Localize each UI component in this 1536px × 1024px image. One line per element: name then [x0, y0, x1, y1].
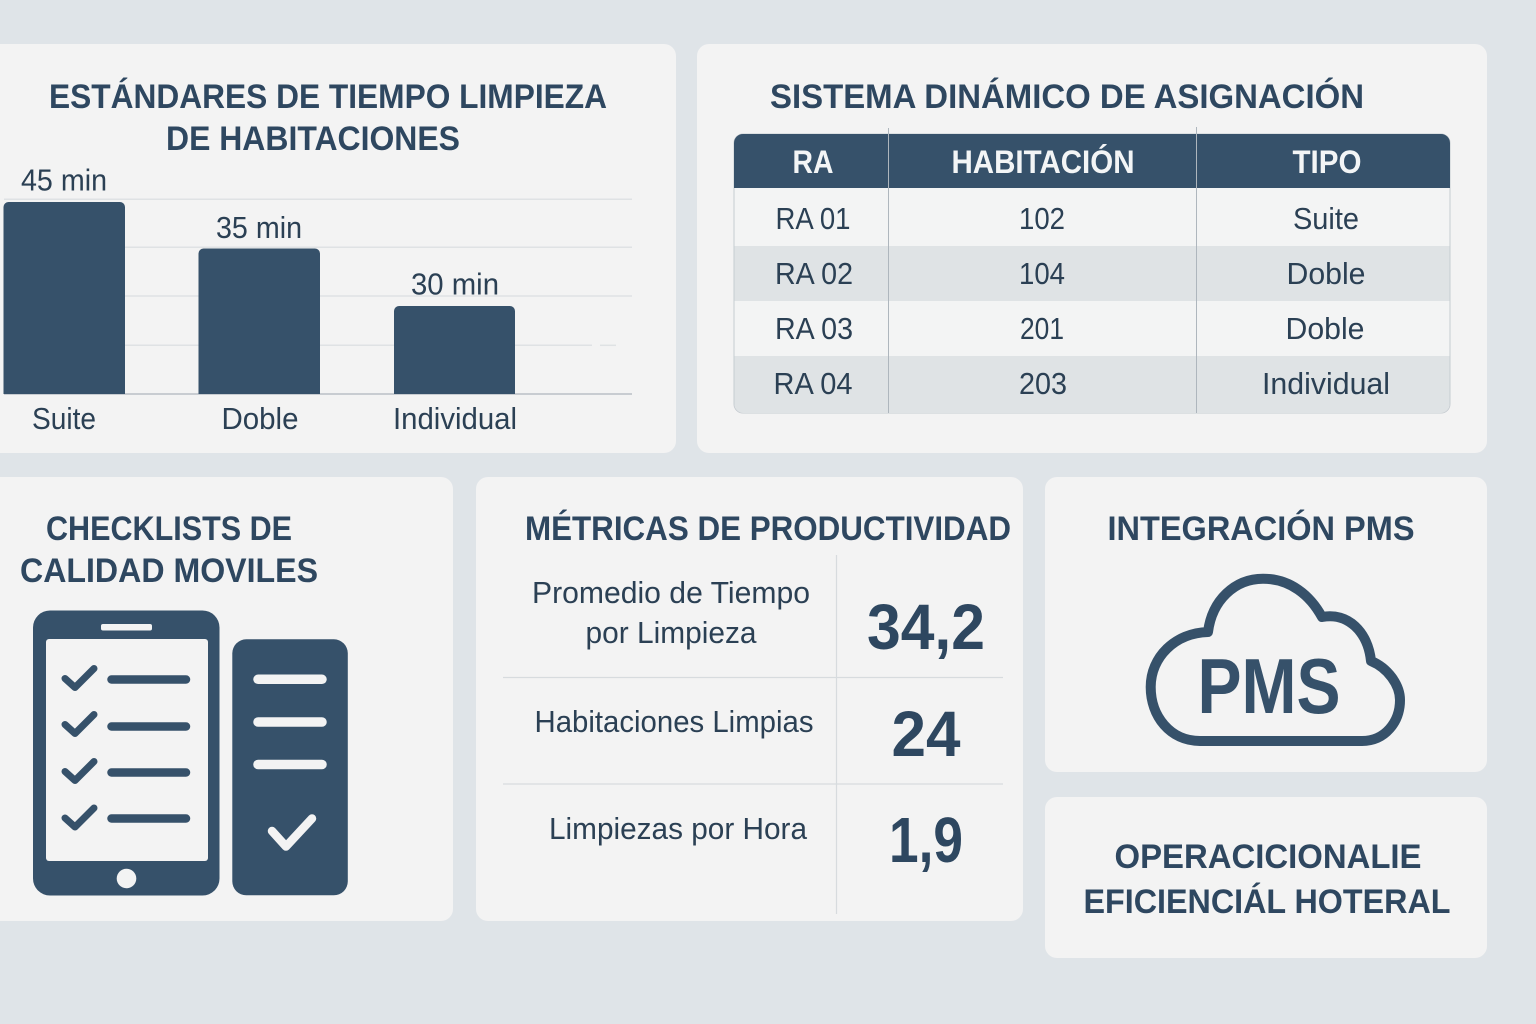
assignment table: Individual — [1262, 366, 1390, 401]
bar chart: 30 min — [411, 266, 499, 302]
assignment table: RA 04 — [774, 366, 852, 401]
metric: rooms cleaned: 24 — [892, 698, 961, 770]
metric: rooms cleaned: Habitaciones Limpias — [534, 704, 814, 739]
panel: productivity metrics — [476, 477, 1023, 921]
panel: dynamic assignment system — [697, 44, 1487, 453]
assignment table: Suite — [1293, 201, 1359, 236]
heading: productivity metrics: MÉTRICAS DE PRODUCTIVIDAD — [525, 510, 1011, 548]
icon: tablet with checklist — [33, 610, 220, 896]
assignment table: 104 — [1019, 256, 1065, 291]
assignment table: RA 03 — [775, 311, 853, 346]
bar chart: Suite — [32, 401, 96, 436]
bar chart: 45 min — [21, 162, 107, 198]
metric: rooms cleaned — [534, 698, 961, 770]
metric: cleanings per hour — [549, 804, 963, 876]
metric: average time: Promedio de Tiempo — [532, 575, 810, 610]
metric: cleanings per hour: Limpiezas por Hora — [549, 811, 808, 846]
heading: assignment system: SISTEMA DINÁMICO DE ASIGNACIÓN — [770, 78, 1364, 116]
assignment table: 102 — [1019, 201, 1065, 236]
heading: checklists: CHECKLISTS DE — [46, 510, 292, 548]
text: operational efficiency: EFICIENCIÁL HOTERAL — [1084, 883, 1450, 921]
assignment table: RA 02 — [775, 256, 853, 291]
heading: checklists: CALIDAD MOVILES — [20, 552, 318, 590]
bar chart: Doble — [222, 401, 298, 436]
assignment table: Doble — [1286, 311, 1364, 346]
metric: average time: 34,2 — [867, 591, 985, 663]
assignment table: Doble — [1286, 256, 1366, 291]
panel: hotel operational efficiency — [1045, 797, 1487, 958]
metric: average time: por Limpieza — [586, 615, 757, 650]
panel: PMS integration — [1045, 477, 1487, 772]
assignment table: HABITACIÓN — [952, 144, 1134, 180]
heading: time standards: ESTÁNDARES DE TIEMPO LIMPIEZA — [49, 78, 607, 116]
panel: time standards bar chart — [0, 44, 676, 453]
icon: PMS cloud — [1151, 579, 1400, 741]
text: operational efficiency — [1084, 838, 1450, 921]
assignment table — [734, 127, 1450, 413]
heading: time standards — [49, 78, 607, 158]
assignment table: RA 01 — [776, 201, 850, 236]
assignment table: RA — [792, 144, 834, 180]
bar chart — [4, 162, 517, 436]
metric: average time — [532, 575, 985, 663]
icon: phone with check — [232, 639, 348, 895]
assignment table: 201 — [1020, 311, 1064, 346]
metric: cleanings per hour: 1,9 — [889, 804, 963, 876]
panel: mobile quality checklists — [0, 477, 453, 921]
bar chart: Individual — [393, 401, 517, 436]
assignment table: TIPO — [1292, 144, 1362, 180]
heading: time standards: DE HABITACIONES — [166, 120, 460, 158]
bar chart: 35 min — [216, 210, 302, 245]
heading: PMS integration: INTEGRACIÓN PMS — [1108, 510, 1414, 548]
assignment table: 203 — [1019, 366, 1067, 401]
icon: PMS cloud: PMS — [1198, 642, 1340, 730]
text: operational efficiency: OPERACICIONALIE — [1114, 838, 1422, 876]
heading: checklists — [20, 510, 318, 590]
